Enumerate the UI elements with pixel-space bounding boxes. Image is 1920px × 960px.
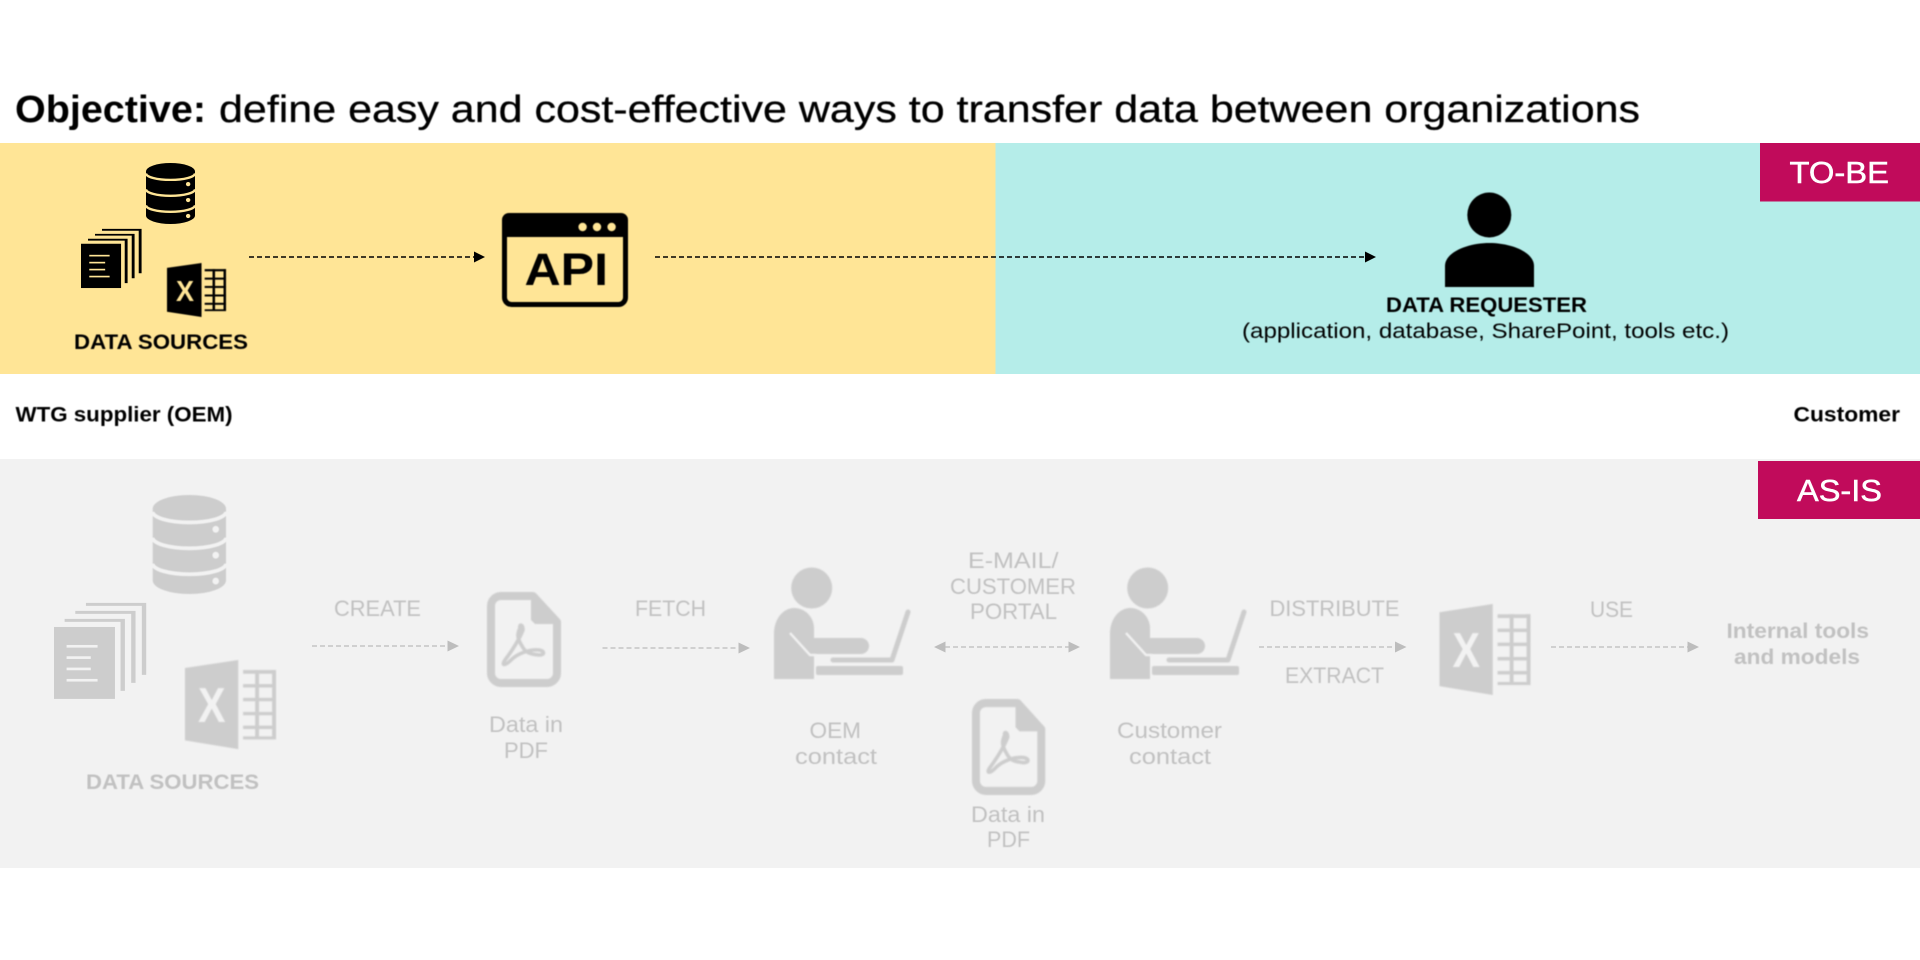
- icon: PDF file: [491, 596, 559, 683]
- arrow: sources to API: [249, 252, 485, 262]
- label: distribute: DISTRIBUTE: [1270, 596, 1400, 621]
- label: data in PDF in transit: PDF: [987, 827, 1030, 852]
- icon: excel file: [1440, 604, 1530, 695]
- label: WTG supplier: WTG supplier (OEM): [16, 404, 232, 426]
- icon: data requester person: [1445, 192, 1534, 287]
- title: Objective:: [15, 89, 206, 131]
- label: customer contact: [1117, 718, 1222, 769]
- label: data requester: DATA REQUESTER: [1386, 294, 1587, 317]
- label: data in PDF in transit: [971, 802, 1045, 852]
- icon: API window: API: [524, 244, 608, 295]
- badge: AS-IS: [1758, 461, 1920, 519]
- label: customer contact: Customer: [1117, 718, 1222, 743]
- arrow: fetch: [602, 642, 750, 654]
- icon: documents: [81, 230, 140, 288]
- badge: AS-IS: AS-IS: [1797, 473, 1882, 508]
- label: data requester examples: (application, database, SharePoint, tools etc.): [1242, 320, 1729, 343]
- label: customer contact: contact: [1129, 744, 1211, 769]
- label: e-mail / customer portal: PORTAL: [970, 599, 1057, 624]
- label: OEM contact: OEM: [810, 718, 861, 743]
- icon: excel: X: [176, 276, 195, 308]
- icon: excel: X: [198, 679, 226, 733]
- icon: documents: [54, 604, 144, 699]
- panel: customer side background: [996, 143, 1920, 374]
- icon: excel file: X: [1452, 624, 1480, 678]
- panel: as-is: [0, 459, 1920, 868]
- arrow: API to data requester: [655, 252, 1376, 262]
- arrow: two-way exchange: [934, 642, 1080, 652]
- icon: PDF file in transit: [976, 703, 1043, 791]
- badge: TO-BE: TO-BE: [1790, 155, 1889, 190]
- label: internal tools and models: [1726, 620, 1869, 669]
- icon: excel: [185, 660, 276, 749]
- title: define easy and cost-effective ways to transfer data between organizations: [219, 89, 1640, 131]
- icon: database: [153, 495, 226, 594]
- label: e-mail / customer portal: [950, 548, 1076, 624]
- label: data sources: DATA SOURCES: [86, 771, 259, 794]
- icon: excel: [167, 263, 226, 317]
- badge: TO-BE: [1760, 143, 1920, 202]
- arrow: create: [312, 640, 459, 652]
- label: internal tools and models: and models: [1734, 646, 1860, 669]
- label: customer: Customer: [1794, 404, 1900, 426]
- icon: database: [146, 163, 195, 224]
- label: data sources: DATA SOURCES: [74, 331, 248, 354]
- label: data in PDF: [489, 712, 563, 763]
- panel: as-is background: [0, 459, 1920, 868]
- panel: WTG supplier side background: [0, 143, 996, 374]
- label: internal tools and models: Internal tools: [1726, 620, 1869, 643]
- icon: customer contact at laptop: [1110, 568, 1244, 679]
- label: data in PDF in transit: Data in: [971, 802, 1045, 827]
- label: OEM contact: [795, 718, 877, 769]
- panel: to-be: [0, 143, 1920, 374]
- arrow: use: [1551, 642, 1699, 652]
- icon: API window: [502, 213, 628, 304]
- arrow: distribute and extract: [1259, 642, 1406, 652]
- label: create: CREATE: [334, 596, 421, 621]
- label: OEM contact: contact: [795, 744, 877, 769]
- label: extract: EXTRACT: [1285, 663, 1384, 688]
- label: e-mail / customer portal: E-MAIL/: [968, 548, 1060, 573]
- label: data in PDF: Data in: [489, 712, 563, 737]
- icon: OEM contact at laptop: [774, 568, 908, 679]
- label: fetch: FETCH: [635, 596, 706, 621]
- label: data in PDF: PDF: [504, 738, 548, 763]
- label: use: USE: [1590, 597, 1633, 622]
- label: e-mail / customer portal: CUSTOMER: [950, 574, 1076, 599]
